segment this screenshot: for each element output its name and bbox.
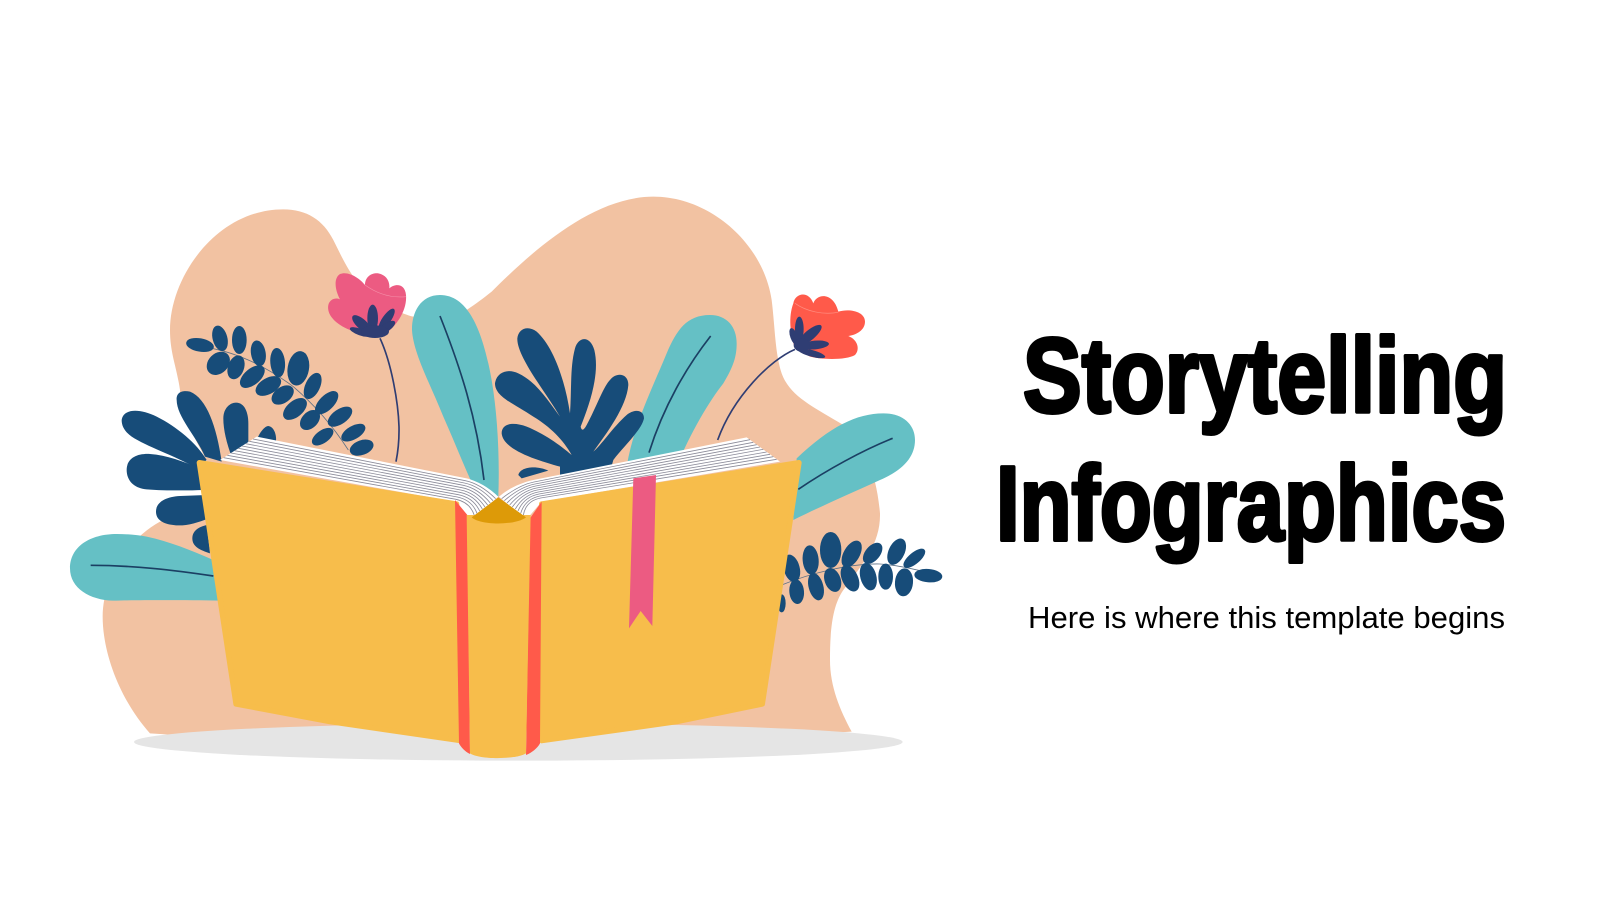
flower: pink [328,273,406,462]
dark blue plant: left [122,391,276,553]
teal leaf: bottom left [70,534,220,601]
book [199,437,799,758]
subtitle: Here is where this template begins [1028,600,1505,635]
teal leaf: far right [793,413,915,520]
ground shadow [134,723,903,761]
fern: upper left [186,325,375,458]
spine bands [455,500,542,755]
book pages: right [499,437,780,520]
flower: red [718,295,865,440]
teal leaf: tall left [412,295,499,500]
bookmark [629,475,656,628]
fern: lower right [778,533,942,612]
teal leaf: centre right [627,315,737,467]
spine top [472,497,526,523]
book left cover [199,463,461,741]
book spine [467,515,531,758]
title line 1: Storytelling [1023,317,1507,435]
book pages: left [220,437,498,520]
illustration: open book with plants [70,197,942,761]
dark blue plant: centre [495,328,644,483]
book right cover [542,463,799,741]
peach background blob [103,197,880,753]
title [996,317,1507,563]
